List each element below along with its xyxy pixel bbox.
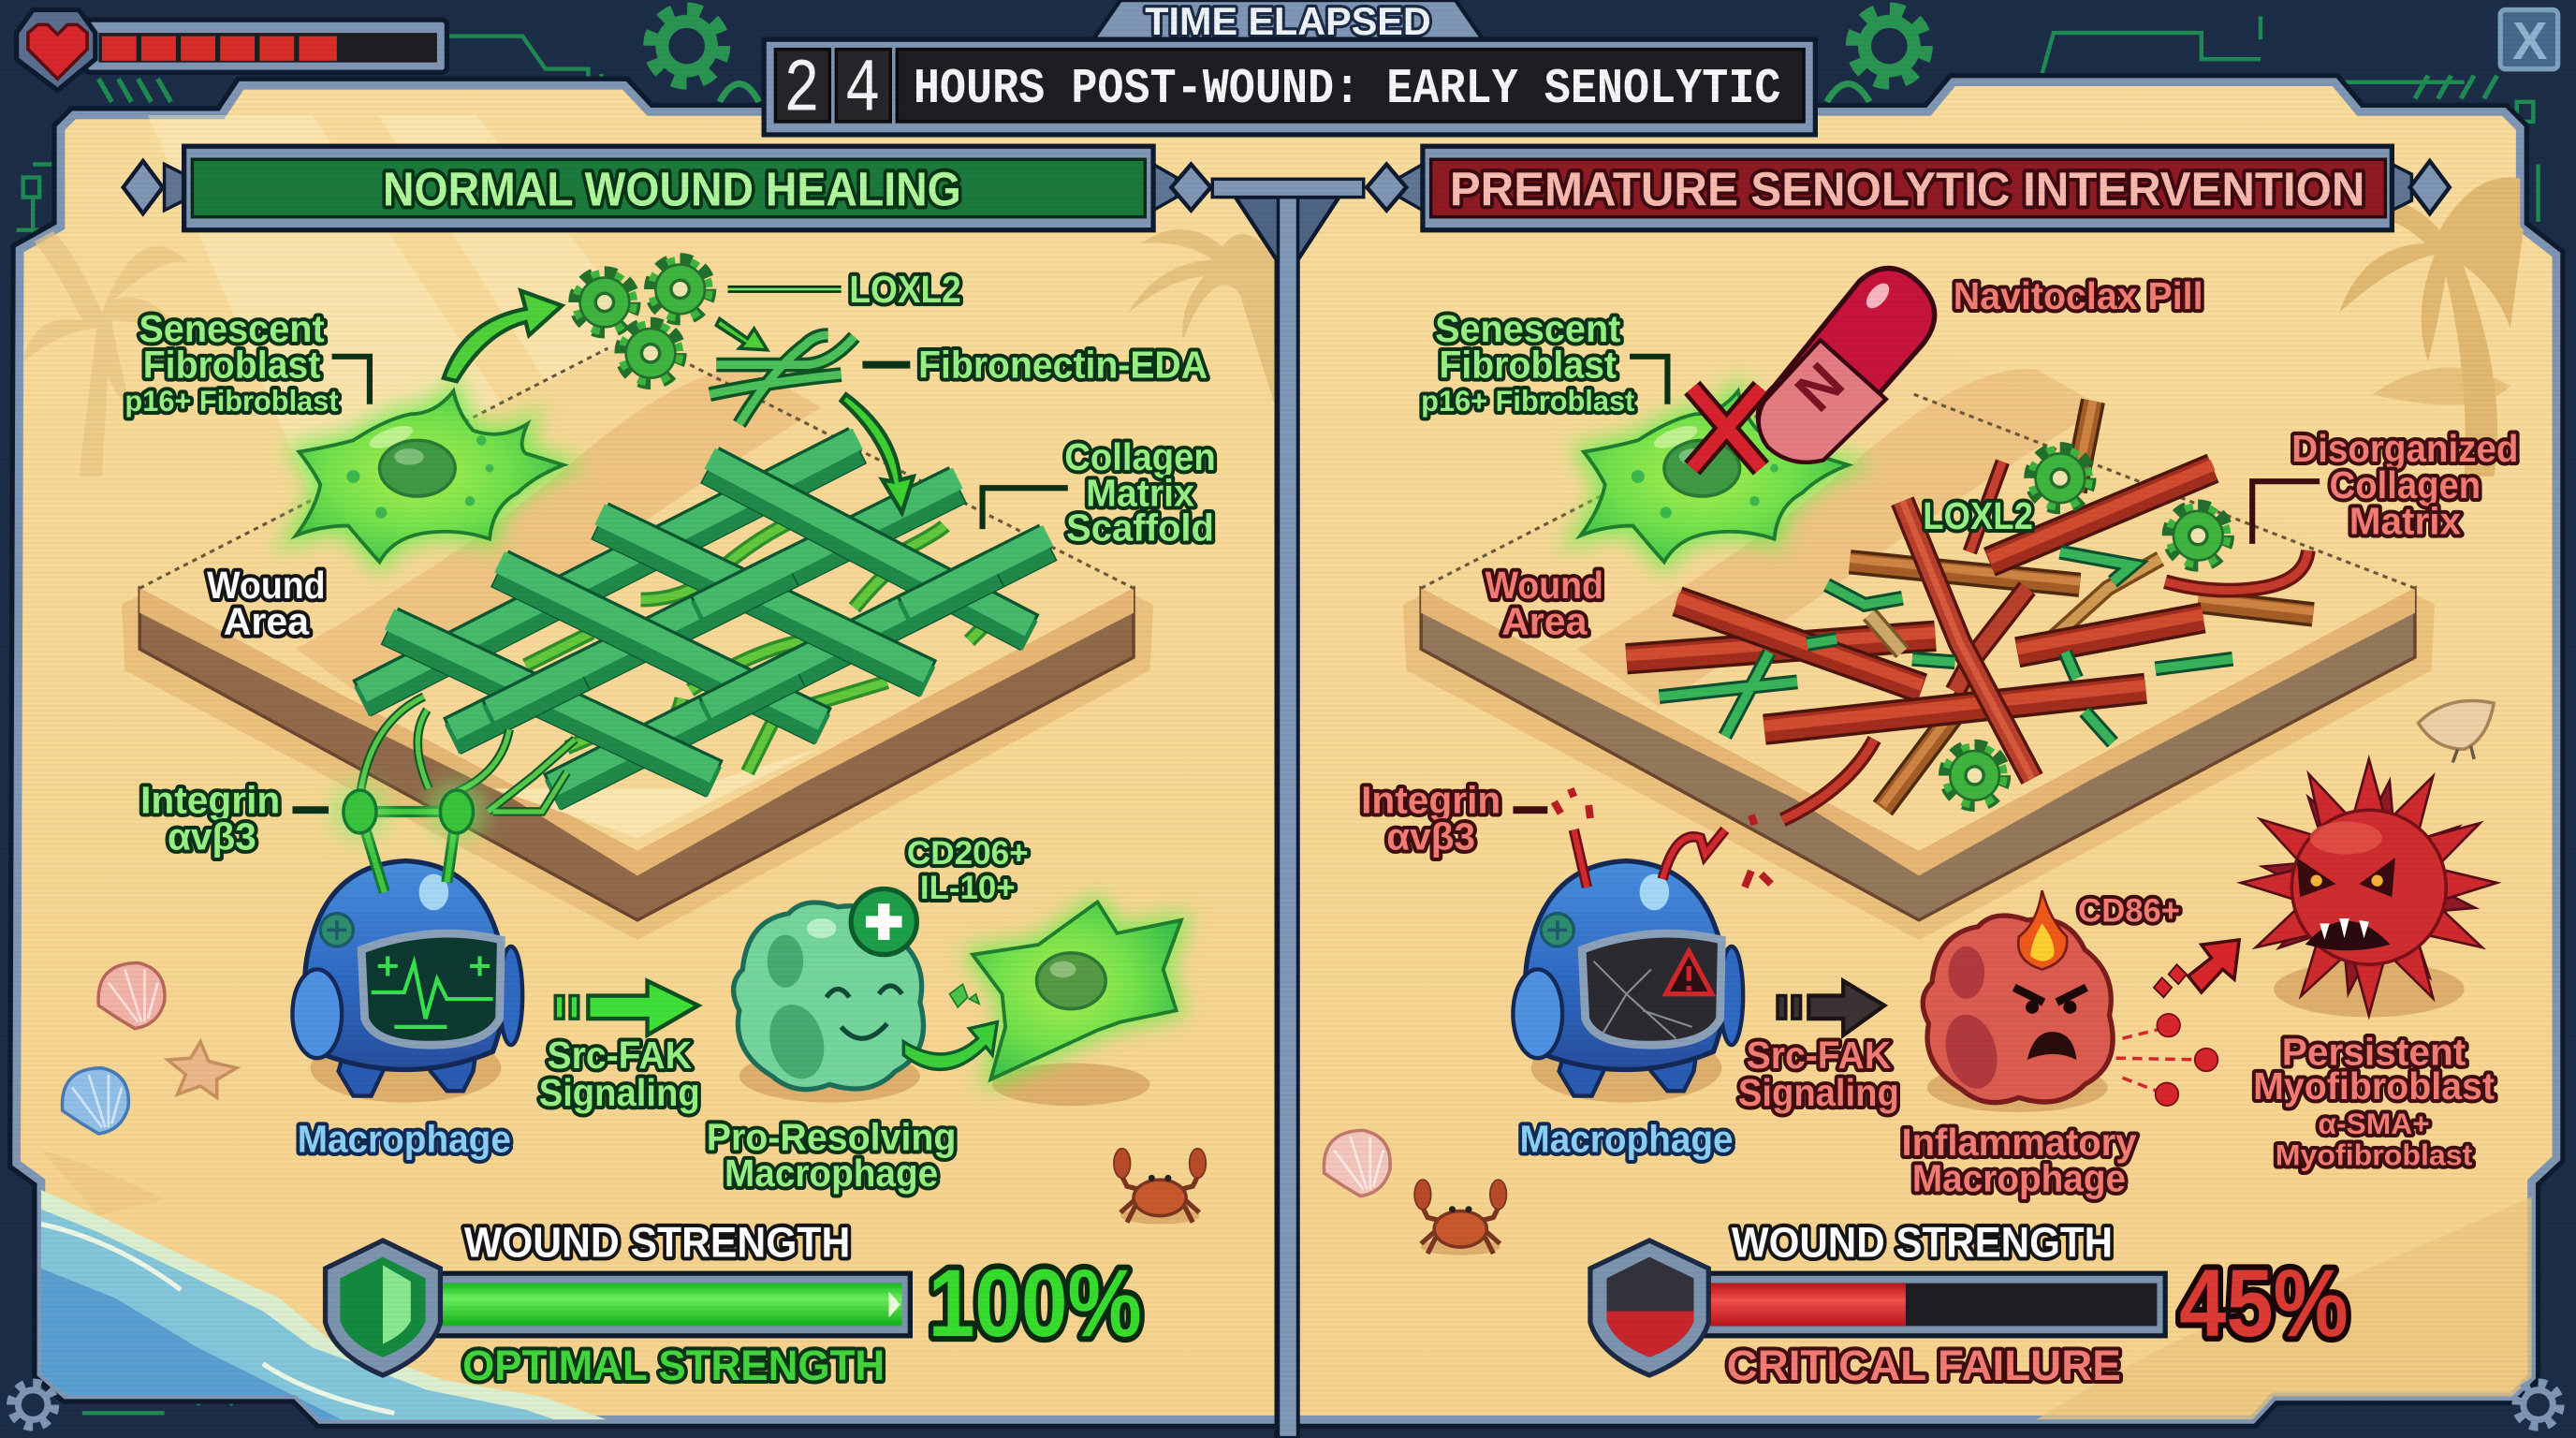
wound bed left: [122, 337, 1153, 940]
icon: crab left: [1114, 1149, 1206, 1224]
icon: hud gear left: [651, 10, 723, 82]
icon: green shield: [326, 1240, 440, 1375]
icon: loxl2 gears: [575, 259, 710, 383]
sun beams: [148, 114, 637, 497]
label: src-fak signaling right: Signaling: [1738, 1071, 1899, 1114]
label: critical failure: CRITICAL FAILURE: [1727, 1342, 2121, 1389]
label: disorganized collagen matrix: Collagen: [2330, 463, 2481, 506]
label: senescent fibroblast right: Senescent: [1435, 307, 1620, 350]
label: loxl2 right: LOXL2: [1923, 494, 2033, 537]
icon: senescent fibroblast right: [1580, 391, 1848, 562]
label: persistent myofibroblast: Myofibroblast: [2276, 1137, 2473, 1171]
icon: heart: [28, 24, 87, 79]
broken integrin fragments: [1554, 788, 1771, 888]
label: persistent myofibroblast: Persistent: [2282, 1030, 2466, 1073]
progress bar right: [1699, 1273, 2165, 1336]
label: macrophage right: Macrophage: [1519, 1117, 1734, 1160]
label: macrophage: Macrophage: [298, 1117, 511, 1160]
label: wound area right: Area: [1501, 599, 1588, 642]
icon: macrophage damaged: [1513, 829, 1743, 1103]
icon: shell and hermit crab: [1324, 701, 2494, 1196]
label: disorganized collagen matrix: Disorganized: [2291, 427, 2519, 470]
heading: normal wound healing: [124, 146, 1211, 230]
label: collagen matrix scaffold: [983, 435, 1216, 549]
label: loxl2: LOXL2: [849, 268, 961, 311]
label: senescent fibroblast: [124, 307, 370, 418]
arrow: to myofibroblast: [2154, 940, 2239, 997]
icon: damaged shield: [1590, 1240, 1708, 1375]
digit: 2: 2: [783, 49, 820, 134]
water: [41, 1190, 607, 1419]
icon: navitoclax pill: N: [1783, 350, 1856, 423]
label: integrin: Integrin: [140, 779, 280, 822]
icon: red x: [1692, 388, 1761, 468]
label: senescent fibroblast right: p16+ Fibroblast: [1421, 384, 1635, 418]
label: integrin right: αvβ3: [1386, 814, 1475, 858]
disorganized collagen: [1627, 401, 2313, 820]
icon: pro-resolving macrophage: [734, 888, 923, 1103]
label: collagen matrix scaffold: Collagen: [1064, 435, 1216, 478]
arrow: src-fak dark: [1778, 981, 1884, 1035]
icon: hud gear right: [1853, 10, 1925, 82]
label: integrin: [140, 779, 329, 858]
central divider: [1212, 179, 1364, 1438]
label: inflammatory macrophage: Inflammatory: [1902, 1121, 2137, 1164]
time elapsed tab: TIME ELAPSED: [1145, 0, 1431, 43]
icon: navitoclax pill: [1758, 268, 1935, 462]
label: senescent fibroblast: Senescent: [139, 307, 325, 350]
label: disorganized collagen matrix: Matrix: [2349, 499, 2462, 542]
icon: resolved fibroblast: [949, 902, 1181, 1106]
arrow: fibroblast to gears: [444, 291, 562, 381]
label: wound area: [207, 564, 326, 642]
label: wound area right: Wound: [1486, 564, 1603, 607]
icon: persistent myofibroblast: [2240, 759, 2497, 1017]
inflammatory signals: [2116, 1014, 2217, 1106]
sand dune right bottom: [2037, 1196, 2531, 1419]
label: wound area right: [1486, 564, 1603, 642]
icon: scattered gears: [1945, 448, 2228, 805]
label: senescent fibroblast right: [1421, 307, 1667, 418]
label: persistent myofibroblast: [2253, 1030, 2495, 1171]
label: cd206 il-10: [907, 835, 1029, 906]
arrow: gears to fibronectin: [716, 318, 768, 350]
label: inflammatory macrophage: [1902, 1121, 2137, 1199]
label: src-fak signaling right: [1738, 1034, 1899, 1114]
label: cd206 il-10: CD206+: [907, 835, 1029, 872]
close button: [2500, 10, 2558, 70]
label: integrin right: Integrin: [1361, 779, 1500, 822]
icon: senescent fibroblast: [296, 391, 564, 562]
icon: fibronectin strands: [710, 335, 855, 424]
heading: premature senolytic intervention: PREMATURE SENOLYTIC INTERVENTION: [1450, 162, 2364, 215]
label: src-fak signaling: Signaling: [539, 1071, 700, 1114]
panel: normal wound healing: [62, 259, 1216, 1389]
icon: flame: [2018, 890, 2067, 969]
palm right: [2339, 178, 2530, 477]
label: disorganized collagen matrix: [2252, 427, 2519, 544]
label: src-fak signaling: [539, 1034, 700, 1114]
icon: corner gear right: [2517, 1384, 2559, 1426]
value: 100 percent: 100%: [929, 1250, 1142, 1357]
icon: shells and starfish: [62, 962, 237, 1134]
label: persistent myofibroblast: α-SMA+: [2318, 1107, 2430, 1140]
label: wound strength right: WOUND STRENGTH: [1732, 1219, 2113, 1267]
label: fibronectin-eda: Fibronectin-EDA: [918, 344, 1208, 387]
timer caption: HOURS POST-WOUND: EARLY SENOLYTIC: [914, 61, 1781, 117]
arrow: src-fak: [555, 981, 698, 1035]
integrin vines: [359, 697, 575, 812]
label: optimal strength: OPTIMAL STRENGTH: [462, 1342, 885, 1389]
arrow: fibronectin to collagen: [842, 394, 914, 513]
label: inflammatory macrophage: Macrophage: [1912, 1156, 2126, 1199]
label: pro-resolving macrophage: [707, 1116, 956, 1195]
strength gauge right: [1590, 1219, 2349, 1389]
palm left: [23, 223, 194, 477]
label: senescent fibroblast: p16+ Fibroblast: [124, 384, 339, 418]
label: wound strength left: WOUND STRENGTH: [464, 1219, 850, 1267]
heading: premature senolytic intervention: [1367, 146, 2450, 230]
health bar: [17, 10, 446, 91]
label: pro-resolving macrophage: Pro-Resolving: [707, 1116, 956, 1159]
label: persistent myofibroblast: Myofibroblast: [2253, 1064, 2495, 1108]
icon: inflammatory macrophage: [1923, 890, 2113, 1112]
label: senescent fibroblast right: Fibroblast: [1439, 344, 1617, 387]
label: src-fak signaling right: Src-FAK: [1747, 1034, 1891, 1077]
label: wound area: Wound: [207, 564, 326, 607]
label: pro-resolving macrophage: Macrophage: [724, 1152, 938, 1195]
close button: X: [2512, 11, 2548, 70]
icon: corner gear left: [11, 1384, 54, 1426]
wound bed right: [1403, 337, 2435, 940]
collagen matrix scaffold: [361, 439, 1048, 795]
label: wound area: Area: [224, 599, 310, 642]
icon: macrophage healthy: [292, 782, 522, 1103]
label: integrin: αvβ3: [168, 814, 256, 858]
value: 45 percent: 45%: [2179, 1250, 2349, 1357]
timer header: [764, 0, 1815, 135]
strength gauge left: [326, 1219, 1142, 1389]
progress bar left: [431, 1273, 910, 1336]
label: senescent fibroblast: Fibroblast: [143, 344, 320, 387]
label: collagen matrix scaffold: Scaffold: [1066, 506, 1214, 549]
label: cd86: CD86+: [2078, 893, 2180, 930]
label: integrin right: [1361, 779, 1547, 858]
label: collagen matrix scaffold: Matrix: [1086, 472, 1194, 515]
label: src-fak signaling: Src-FAK: [547, 1034, 692, 1077]
panel: premature senolytic intervention: [1324, 268, 2519, 1389]
label: cd206 il-10: IL-10+: [920, 870, 1016, 906]
heading: normal wound healing: NORMAL WOUND HEALING: [383, 162, 961, 215]
icon: crab right: [1414, 1180, 1506, 1255]
arrow: macrophage to fibroblast: [903, 1022, 997, 1069]
palm middle: [1129, 229, 1277, 411]
digit: 4: 4: [844, 49, 881, 134]
label: navitoclax pill: Navitoclax Pill: [1954, 274, 2203, 317]
